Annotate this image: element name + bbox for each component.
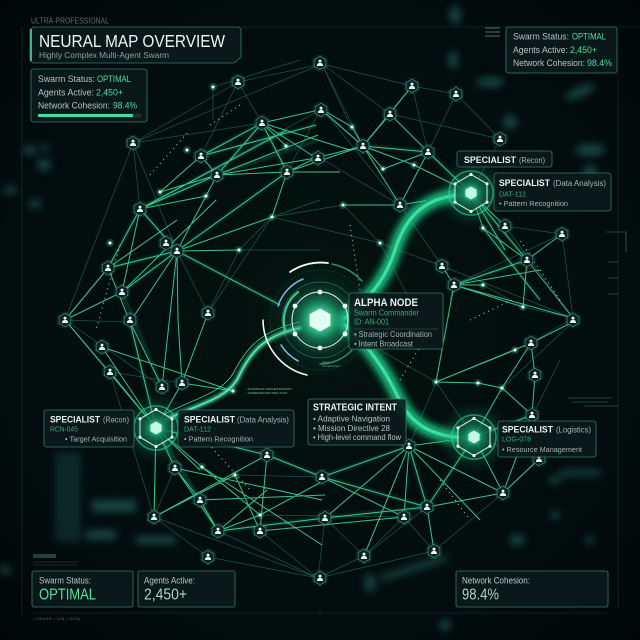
tiny annotation: center left: • STRATEGIC ORCHESTRATION [246,387,291,391]
bright edges [65,86,573,556]
node [523,335,539,351]
callout: specialist logistics: SPECIALIST [502,424,553,435]
callout: strategic intent: • High-level command flow [313,433,401,442]
node [356,548,372,564]
node [200,549,216,565]
callout: specialist recon (bottom): SPECIALIST [50,415,100,426]
node [125,135,141,151]
stat card: swarm status: OPTIMAL [39,586,96,604]
alpha core with rings: Orchestration [322,364,340,368]
data tube: alpha to recon hub [345,195,460,318]
callout: specialist data analysis (bottom): DAT-112 [184,425,211,434]
node [200,305,216,321]
node [169,243,185,259]
node [355,138,371,154]
node [314,469,330,485]
callout: strategic intent: STRATEGIC INTENT [313,402,397,414]
node [495,485,511,501]
callout: specialist recon (bottom): (Recon) [103,416,129,425]
dim edges [65,60,573,578]
data stream: alpha to bottom-left hub [165,322,300,420]
status panel: top left: Agents Active: [38,88,94,98]
node [279,164,295,180]
footer legend: • SWARM • ION • DATA [33,617,81,621]
callout: specialist data analysis (bottom): SPECIALIST [184,415,235,426]
data tube: alpha to logistics hub [345,325,465,438]
callout: specialist data analysis (bottom): • Pattern Recognition [184,435,253,444]
node [492,131,508,147]
tiny annotation: right side [568,232,626,406]
callout: strategic intent: • Adaptive Navigation [313,415,390,424]
node [401,438,417,454]
status panel: top left: 98.4% [113,101,137,111]
callout: specialist recon (top) [457,151,552,167]
particle trails [96,105,560,520]
node [420,144,436,160]
stat card: swarm status [32,571,133,607]
callout: specialist recon (bottom): RCN-045 [50,425,78,434]
stat card: network cohesion [456,571,608,607]
callout: alpha node: • Strategic Coordination [354,330,432,339]
tiny note: bottom left [33,554,78,565]
hub: specialist bottom left [120,392,192,464]
node [310,150,326,166]
edge glow [108,123,540,531]
hub: specialist logistics [438,401,510,473]
node [419,499,435,515]
node [259,447,275,463]
callout: specialist recon (top): (Recon) [519,156,545,165]
subtitle: Highly Complex Multi-Agent Swarm [39,50,169,60]
node [114,284,130,300]
status panel: top left: Network Cohesion: [38,101,110,111]
callout: specialist data analysis (top): DAT-112 [499,190,526,198]
tiny annotation: center left [246,387,291,395]
node [313,102,329,118]
node [382,106,398,122]
callout: alpha node [349,293,443,349]
callout: specialist data analysis (top): (Data Analysis) [553,179,606,188]
tiny annotation: center left: • COMMAND ROUTING SYNC [246,391,288,395]
callout: specialist data analysis (bottom) [178,410,294,447]
node [100,260,116,276]
hamburger menu icon [485,28,500,36]
status panel: top right: OPTIMAL [572,32,606,42]
node [519,252,535,268]
small relay points [106,83,527,519]
callout: alpha node: ALPHA NODE [354,297,418,309]
eyebrow label: ULTRA-PROFESSIONAL [31,16,109,26]
node [317,510,333,526]
node [94,339,110,355]
node [158,235,174,251]
callout: specialist logistics: • Resource Management [502,445,583,454]
node [312,55,328,71]
node [57,312,73,328]
title panel [30,27,241,63]
callout: specialist logistics: LOG-078 [502,434,531,444]
node [146,509,162,525]
status panel: top right: Network Cohesion: [513,58,585,68]
callout: specialist data analysis (top): SPECIALIST [499,178,550,189]
alpha core with rings [258,258,382,382]
status panel: top right [506,27,617,73]
node [209,167,225,183]
node [192,492,208,508]
node [497,218,513,234]
stat card: agents active [138,571,235,607]
node [154,379,170,395]
agent nodes [57,55,581,586]
callout: specialist data analysis (top): • Pattern Recognition [499,199,568,208]
callout: specialist recon (bottom): • Target Acquisition [65,435,127,444]
status panel: top left [31,69,147,122]
status panel: top left: 2,450+ [96,88,123,98]
callout: specialist recon (bottom) [44,410,134,447]
node [210,523,226,539]
node [392,197,408,213]
stat card: agents active: 2,450+ [144,586,187,604]
status panel: top left: OPTIMAL [97,74,131,84]
callout: strategic intent: • Mission Directive 28 [313,424,391,433]
node [167,460,183,476]
node [132,201,148,217]
callout: specialist data analysis (bottom): (Data Analysis) [237,416,289,425]
node [531,451,547,467]
alpha core with rings: Intent [322,360,330,364]
node [122,312,138,328]
stat card: swarm status: Swarm Status: [39,576,91,586]
node [193,148,209,164]
node [554,226,570,242]
title: NEURAL MAP OVERVIEW [39,31,225,51]
node [527,367,543,383]
stat card: agents active: Agents Active: [144,576,195,586]
callout: alpha node: • Intent Broadcast [354,340,414,349]
status panel: top right: 98.4% [587,58,612,68]
callout: specialist logistics [498,421,596,457]
node [252,523,268,539]
node [254,115,270,131]
status panel: top left: Swarm Status: [38,74,95,84]
node [446,277,462,293]
callout: specialist data analysis (top) [494,173,611,211]
hub: specialist recon top right [435,157,507,229]
stat card: network cohesion: 98.4% [462,586,499,604]
callout: strategic intent [308,399,406,445]
node [434,258,450,274]
progress bar [38,114,141,117]
node [396,509,412,525]
network edges [65,60,573,578]
node [404,78,420,94]
node [102,364,118,380]
callout: alpha node: Swarm Commander [354,308,419,318]
stat card: network cohesion: Network Cohesion: [462,576,530,586]
callout: specialist recon (top): SPECIALIST [464,155,516,166]
node [524,407,540,423]
status panel: top right: Swarm Status: [513,32,569,42]
callout: specialist logistics: (Logistics) [556,425,591,434]
callout: alpha node: ID: AN-001 [354,318,389,327]
node [174,375,190,391]
node [565,312,581,328]
node [426,543,442,559]
node [448,86,464,102]
status panel: top right: Agents Active: [513,45,568,55]
node [312,570,328,586]
node [230,74,246,90]
status panel: top right: 2,450+ [570,45,597,55]
